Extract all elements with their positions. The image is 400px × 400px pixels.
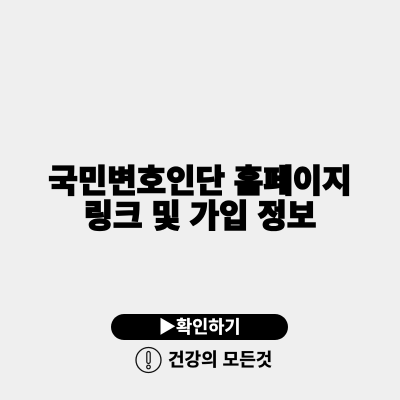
- title: 링크 및 가입 정보: [84, 198, 316, 234]
- title: 국민변호인단 홈페이지: [48, 163, 352, 199]
- button: confirm: [111, 314, 288, 340]
- icon: exclamation circle: [135, 346, 162, 374]
- title: [48, 163, 352, 234]
- button: confirm: ▶확인하기: [159, 317, 240, 337]
- brand label: 건강의 모든것: [168, 350, 272, 370]
